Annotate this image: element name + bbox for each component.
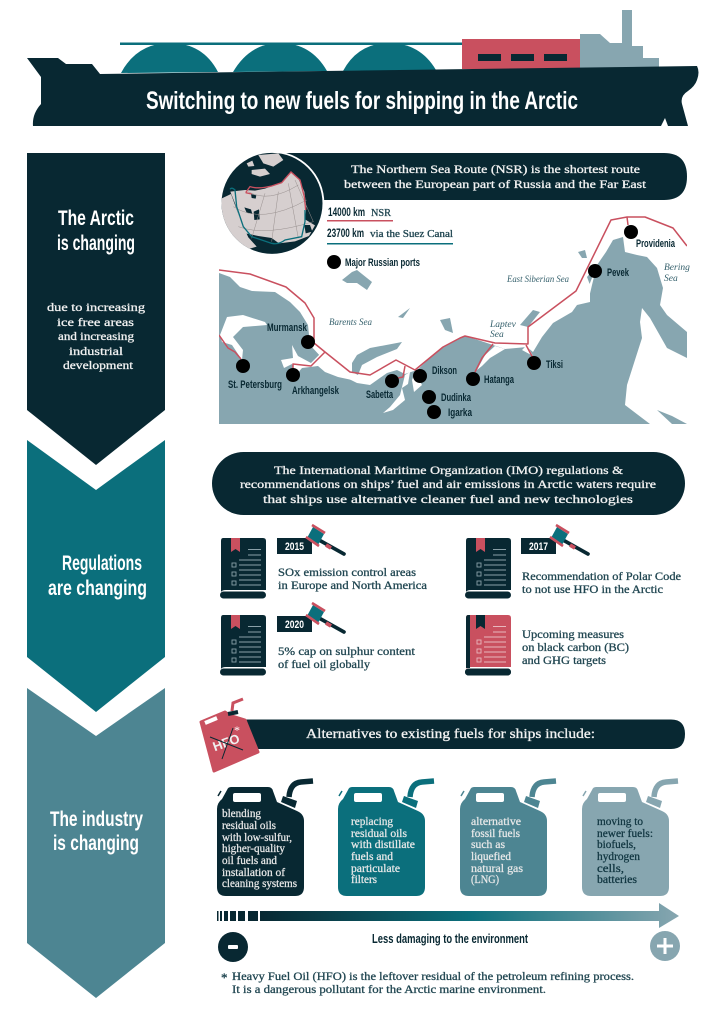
port labels: Pevek [607, 267, 630, 279]
fuel can: distillate [338, 781, 434, 896]
can text: residual oils [351, 828, 407, 840]
can text: cells, [597, 863, 624, 875]
NSR distance: NSR [371, 208, 391, 219]
year tag with gavel [277, 603, 344, 632]
text [522, 627, 629, 667]
map of Russian Arctic [219, 217, 690, 424]
IMO banner [212, 452, 685, 515]
panel: the industry is changing [27, 688, 165, 998]
can text: particulate [351, 863, 400, 875]
port labels: St. Petersburg [228, 379, 282, 391]
panel heading [48, 552, 147, 600]
port dots [236, 225, 638, 419]
icon: crossed out HFO can: * [234, 723, 240, 737]
can text: replacing [351, 816, 393, 828]
shipping route [219, 217, 687, 378]
NSR banner [272, 153, 687, 200]
icon: crossed out HFO can: HFO [211, 731, 242, 754]
panel description: development [63, 358, 134, 372]
can text: natural gas [471, 863, 523, 875]
panel description [47, 300, 145, 372]
can text: alternative [471, 816, 521, 828]
graticule [233, 180, 313, 242]
footnote: * [221, 970, 228, 985]
port labels [228, 238, 676, 419]
panel heading: Regulations [62, 552, 142, 575]
ship illustration [27, 10, 698, 126]
fuel can: LNG [460, 781, 556, 896]
inland seas [244, 194, 312, 233]
sea labels: Sea [664, 274, 678, 284]
can text: such as [471, 839, 505, 851]
can text: with distillate [351, 839, 415, 851]
panel heading [50, 808, 143, 855]
panel heading [57, 207, 135, 255]
alternatives banner [240, 720, 685, 749]
regulation: 2017 [465, 525, 681, 598]
can text [222, 808, 297, 890]
environmental gradient arrow [217, 903, 679, 928]
panel description: industrial [69, 344, 124, 358]
can text: with low-sulfur, [222, 832, 292, 844]
can text: filters [351, 874, 377, 886]
panel description: ice free areas [57, 315, 134, 329]
panel description: and increasing [58, 329, 134, 343]
text: and GHG targets [522, 653, 606, 667]
land masses [218, 153, 315, 250]
can text: moving to [597, 816, 643, 828]
panel description: due to increasing [47, 300, 145, 314]
port labels: Hatanga [484, 374, 515, 386]
icon: red book [465, 615, 511, 676]
regulation: 2020 [220, 603, 416, 676]
funnel and upper house [580, 10, 659, 68]
banner text: Alternatives to existing fuels for ships include: [306, 726, 595, 741]
sea labels: Sea [490, 330, 504, 340]
footnote: Heavy Fuel Oil (HFO) is the leftover residual of the petroleum refining process. [232, 969, 634, 983]
text: 5% cap on sulphur content [278, 644, 416, 658]
port labels: Murmansk [267, 322, 308, 334]
red superstructure [462, 39, 580, 69]
year tag with gavel: 2017 [529, 541, 548, 553]
NSR distance [327, 207, 393, 222]
can text: fuels and [351, 851, 393, 863]
can text [351, 816, 415, 886]
NSR route [246, 172, 306, 210]
can text: biofuels, [597, 839, 636, 851]
year tag with gavel [521, 525, 588, 554]
port labels: Arkhangelsk [292, 385, 340, 397]
regulation: upcoming [465, 615, 629, 676]
can text: newer fuels: [597, 828, 653, 840]
title: Switching to new fuels for shipping in the Arctic [146, 87, 578, 115]
Suez distance: via the Suez Canal [370, 229, 453, 240]
can text: higher-quality [222, 843, 285, 855]
port labels: Tiksi [546, 359, 563, 371]
land [219, 217, 687, 424]
sea labels: Barents Sea [329, 318, 372, 328]
can text: residual oils [222, 820, 276, 832]
icon: book [220, 538, 266, 598]
year tag with gavel: 2015 [285, 541, 304, 553]
globe [218, 151, 324, 256]
text: on black carbon (BC) [522, 640, 629, 654]
text [278, 565, 428, 592]
text: Recommendation of Polar Code [522, 569, 681, 583]
fuel can: newer fuels [582, 781, 678, 896]
panel: regulations are changing [27, 440, 165, 712]
text: Upcoming measures [522, 627, 624, 641]
Suez distance: 23700 km [327, 228, 364, 240]
banner text: between the European part of Russia and the Far East [344, 177, 647, 191]
port labels: Providenia [636, 238, 676, 250]
banner text: The Northern Sea Route (NSR) is the shortest route [351, 162, 640, 176]
sea labels: Laptev [489, 320, 517, 330]
gas tank domes [121, 43, 436, 73]
Suez distance [327, 228, 453, 244]
can text: fossil fuels [471, 828, 520, 840]
can text: blending [222, 808, 261, 820]
panel: the Arctic is changing [27, 153, 165, 465]
banner text [344, 162, 647, 191]
footnote [221, 969, 634, 996]
year tag with gavel [277, 525, 344, 554]
sea labels: Bering [664, 263, 690, 273]
can text [597, 816, 653, 886]
NSR distance: 14000 km [328, 207, 365, 219]
fuel can: blending [217, 781, 313, 896]
text [278, 644, 416, 671]
port labels: Igarka [448, 407, 473, 419]
footnote: It is a dangerous pollutant for the Arctic marine environment. [232, 982, 546, 996]
panel heading: is changing [53, 832, 139, 855]
hull [27, 58, 698, 126]
sea labels [329, 263, 690, 340]
text: in Europe and North America [278, 578, 428, 592]
banner text [240, 463, 656, 506]
banner text: recommendations on ships’ fuel and air emissions in Arctic waters require [240, 477, 656, 491]
text: of fuel oil globally [278, 657, 370, 671]
Suez route [230, 188, 305, 244]
text: SOx emission control areas [278, 565, 416, 579]
panel heading: The industry [50, 808, 143, 831]
icon: crossed out HFO can [201, 699, 258, 771]
text [522, 569, 681, 596]
icon: minus [218, 932, 248, 962]
text: to not use HFO in the Arctic [522, 582, 663, 596]
ports key: Major Russian ports [345, 257, 420, 269]
year tag with gavel: 2020 [285, 619, 304, 631]
can text: cleaning systems [222, 878, 297, 890]
can text: oil fuels and [222, 855, 277, 867]
banner text: that ships use alternative cleaner fuel and new technologies [263, 492, 633, 506]
port labels: Dudinka [441, 392, 472, 404]
deck rail [120, 42, 463, 45]
can text [471, 816, 523, 886]
can text: (LNG) [471, 874, 499, 886]
sea labels: East Siberian Sea [506, 275, 569, 285]
scale label: Less damaging to the environment [372, 931, 528, 946]
can text: batteries [597, 874, 637, 886]
icon: plus [650, 931, 680, 961]
port labels: Dikson [432, 365, 457, 377]
port labels: Sabetta [366, 389, 394, 401]
banner text: The International Maritime Organization (IMO) regulations & [274, 463, 624, 477]
icon: book [465, 538, 511, 598]
panel heading: is changing [57, 232, 135, 255]
regulation: 2015 [220, 525, 428, 598]
icon: book [220, 615, 266, 676]
route distances legend [327, 207, 453, 269]
panel heading: are changing [48, 577, 147, 600]
panel heading: The Arctic [58, 207, 134, 230]
islands [342, 250, 687, 424]
can text: liquefied [471, 851, 511, 863]
can text: installation of [222, 867, 285, 879]
can text: hydrogen [597, 851, 640, 863]
